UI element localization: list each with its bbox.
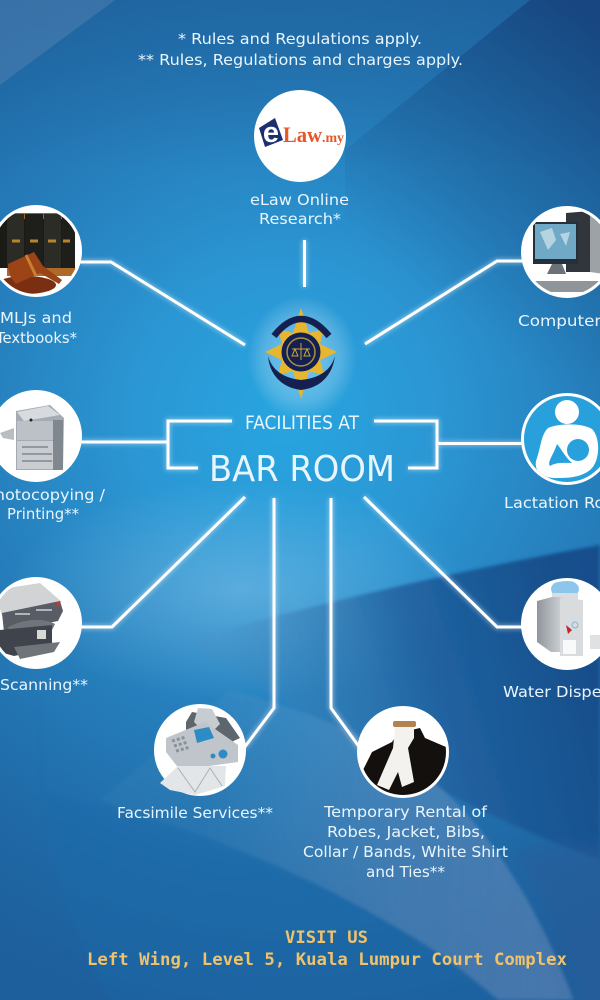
icon: water dispenser: [537, 580, 600, 656]
label: Scanning: Scanning**: [0, 676, 89, 694]
icon: eLaw logo: Law: [283, 122, 322, 147]
icon: fax machine: [160, 708, 240, 795]
label: Rental: Robes, Jacket, Bibs,: [327, 823, 485, 841]
node: Computers: [518, 206, 600, 330]
label: Photocopying: Printing**: [7, 505, 79, 523]
node: MLJs and Textbooks: [0, 205, 82, 347]
label: Rental: and Ties**: [366, 863, 446, 881]
icon: eLaw logo: [259, 117, 344, 149]
label: MLJs: MLJs and: [0, 309, 72, 327]
label: Rental: Collar / Bands, White Shirt: [303, 843, 508, 861]
title bracket: [168, 421, 437, 468]
node: Facsimile Services: [117, 704, 274, 822]
label: Facsimile: Facsimile Services**: [117, 804, 274, 822]
node: Water Dispenser: [503, 578, 600, 701]
footnote: ** Rules, Regulations and charges apply.: [138, 52, 463, 69]
node: eLaw Online Research: [250, 90, 349, 228]
icon: eLaw logo: e: [263, 117, 279, 149]
label: Computers: Computers: [518, 312, 600, 330]
node: Photocopying / Printing: [0, 390, 106, 523]
icon: Bar Malaysia Kuala Lumpur crest: [265, 308, 337, 399]
icon: scanner: [0, 583, 63, 659]
node: Scanning: [0, 577, 89, 694]
title: BAR ROOM: [209, 449, 395, 490]
footer: visit us: VISIT US: [285, 928, 368, 948]
connector lines: [80, 240, 524, 748]
title: [209, 412, 395, 490]
label: eLaw: Research*: [259, 210, 342, 228]
label: Photocopying: [0, 486, 106, 523]
label: Rental: [303, 803, 508, 881]
icon: law books and gavel: [0, 213, 77, 294]
node: Temporary Rental of Robes: [303, 706, 508, 881]
title: FACILITIES AT: [245, 412, 359, 434]
label: MLJs: [0, 309, 77, 347]
icon: desktop computer: [533, 211, 600, 292]
label: eLaw: [250, 191, 349, 228]
icon: photocopier: [0, 405, 64, 470]
label: eLaw: eLaw Online: [250, 191, 349, 209]
footnote: [138, 31, 463, 69]
footnote: * Rules and Regulations apply.: [178, 31, 422, 48]
icon: eLaw logo: .my: [322, 131, 344, 146]
node: Lactation Room: [504, 393, 600, 512]
label: Rental: Temporary Rental of: [323, 803, 488, 821]
icon: barrister robe: [362, 721, 447, 800]
footer: visit us: [87, 928, 567, 970]
footer: visit us: Left Wing, Level 5, Kuala Lumpur Court Complex: [87, 950, 567, 970]
icon: breastfeeding mother and child: [536, 400, 598, 478]
